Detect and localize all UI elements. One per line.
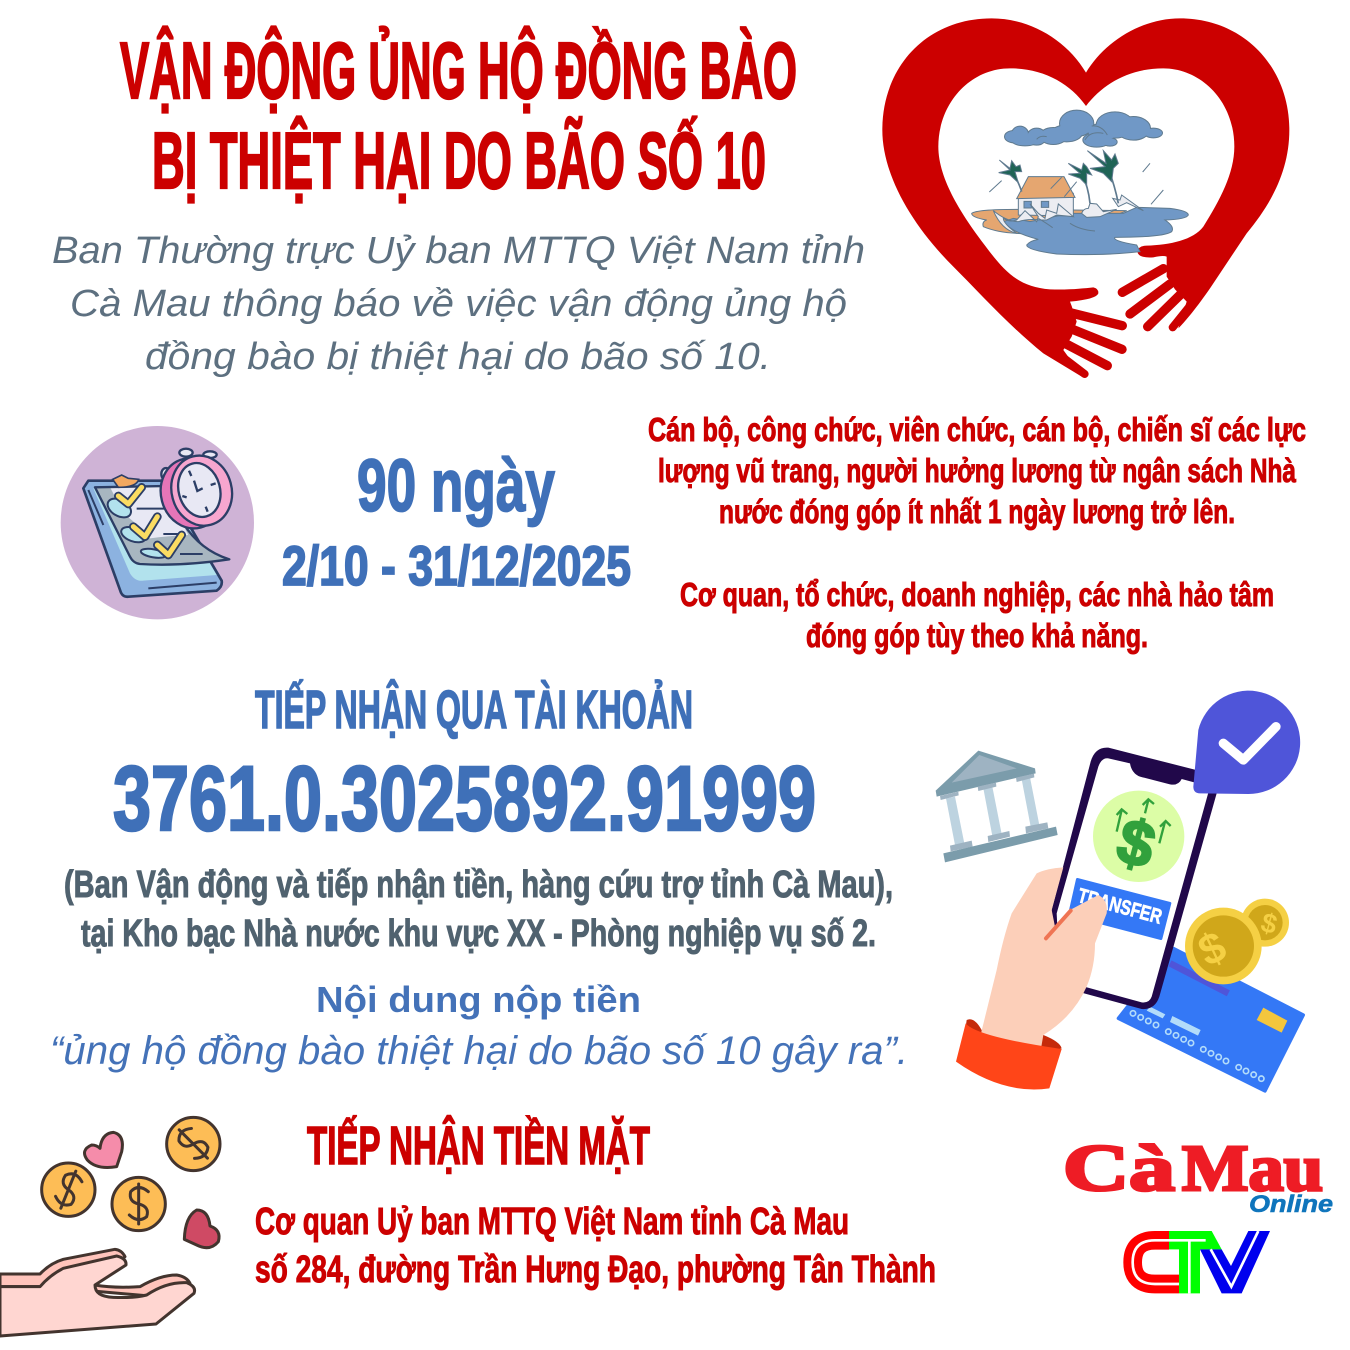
coins bbox=[1185, 899, 1289, 984]
phone bbox=[1052, 748, 1217, 1009]
stopwatch bbox=[153, 449, 240, 535]
hearts bbox=[85, 1132, 122, 1167]
icon: hand receiving coins and hearts bbox=[0, 1117, 220, 1336]
check marks bbox=[118, 487, 182, 555]
icon: calendar checklist with stopwatch bbox=[61, 426, 254, 619]
phone: $ bbox=[1110, 806, 1162, 882]
hand holding phone bbox=[956, 867, 1107, 1089]
payment content heading: Nội dung nộp tiền bbox=[316, 979, 641, 1020]
coins: $ bbox=[1191, 922, 1233, 976]
hand bbox=[0, 1249, 190, 1297]
coins bbox=[42, 1117, 220, 1231]
notebook bbox=[83, 481, 222, 597]
heart body with palms bbox=[882, 18, 1289, 378]
subtitle text block: Ban Thường trực Uỷ ban MTTQ Việt Nam tỉnh bbox=[52, 230, 865, 272]
account holder text: (Ban Vận động và tiếp nhận tiền, hàng cứu trợ tỉnh Cà Mau), bbox=[64, 864, 893, 906]
cash address bbox=[255, 1201, 936, 1291]
title: BỊ THIỆT HẠI DO BÃO SỐ 10 bbox=[152, 116, 766, 205]
fingers bbox=[1053, 269, 1200, 374]
date range: 2/10 - 31/12/2025 bbox=[282, 534, 631, 597]
phone: TRANSFER bbox=[1075, 884, 1164, 929]
coins: $ bbox=[1258, 906, 1280, 940]
duration heading: 90 ngày bbox=[357, 444, 555, 527]
contribution notes bbox=[648, 411, 1306, 654]
account holder text bbox=[64, 864, 893, 955]
logo: Cà Mau Online: Online bbox=[1249, 1191, 1333, 1218]
subtitle text block: Cà Mau thông báo về việc vận động ủng hộ bbox=[70, 283, 847, 325]
logo: Cà Mau Online: Cà bbox=[1063, 1132, 1175, 1205]
logo: Cà Mau Online bbox=[1063, 1132, 1333, 1218]
subtitle text block: đồng bào bị thiệt hại do bão số 10. bbox=[145, 336, 771, 378]
logo: Cà Mau Online: Mau bbox=[1182, 1132, 1323, 1205]
title bbox=[120, 26, 797, 205]
storm scene: island, water, house, palms, clouds bbox=[972, 111, 1188, 255]
cash address: Cơ quan Uỷ ban MTTQ Việt Nam tỉnh Cà Mau bbox=[255, 1201, 849, 1243]
subtitle text block bbox=[52, 230, 865, 378]
logo: CTV bbox=[1133, 1231, 1270, 1293]
bank building bbox=[936, 751, 1058, 862]
check bubble bbox=[1193, 691, 1300, 794]
title: VẬN ĐỘNG ỦNG HỘ ĐỒNG BÀO bbox=[120, 26, 797, 115]
purple circle bbox=[61, 426, 254, 619]
account holder text: tại Kho bạc Nhà nước khu vực XX - Phòng nghiệp vụ số 2. bbox=[81, 913, 876, 955]
credit card bbox=[1118, 948, 1303, 1091]
contribution notes: đóng góp tùy theo khả năng. bbox=[806, 617, 1148, 654]
account heading: TIẾP NHẬN QUA TÀI KHOẢN bbox=[255, 679, 693, 740]
cash heading: TIẾP NHẬN TIỀN MẶT bbox=[307, 1115, 650, 1176]
icon: heart formed by two hands around storm scene bbox=[882, 18, 1289, 378]
checklist page bbox=[95, 486, 229, 565]
account number: 3761.0.3025892.91999 bbox=[113, 748, 816, 850]
payment content text: “ủng hộ đồng bào thiệt hại do bão số 10 gây ra”. bbox=[50, 1029, 908, 1073]
icon: mobile bank transfer illustration bbox=[936, 691, 1303, 1091]
cash address: số 284, đường Trần Hưng Đạo, phường Tân Thành bbox=[255, 1249, 936, 1291]
clouds bbox=[1005, 111, 1162, 147]
